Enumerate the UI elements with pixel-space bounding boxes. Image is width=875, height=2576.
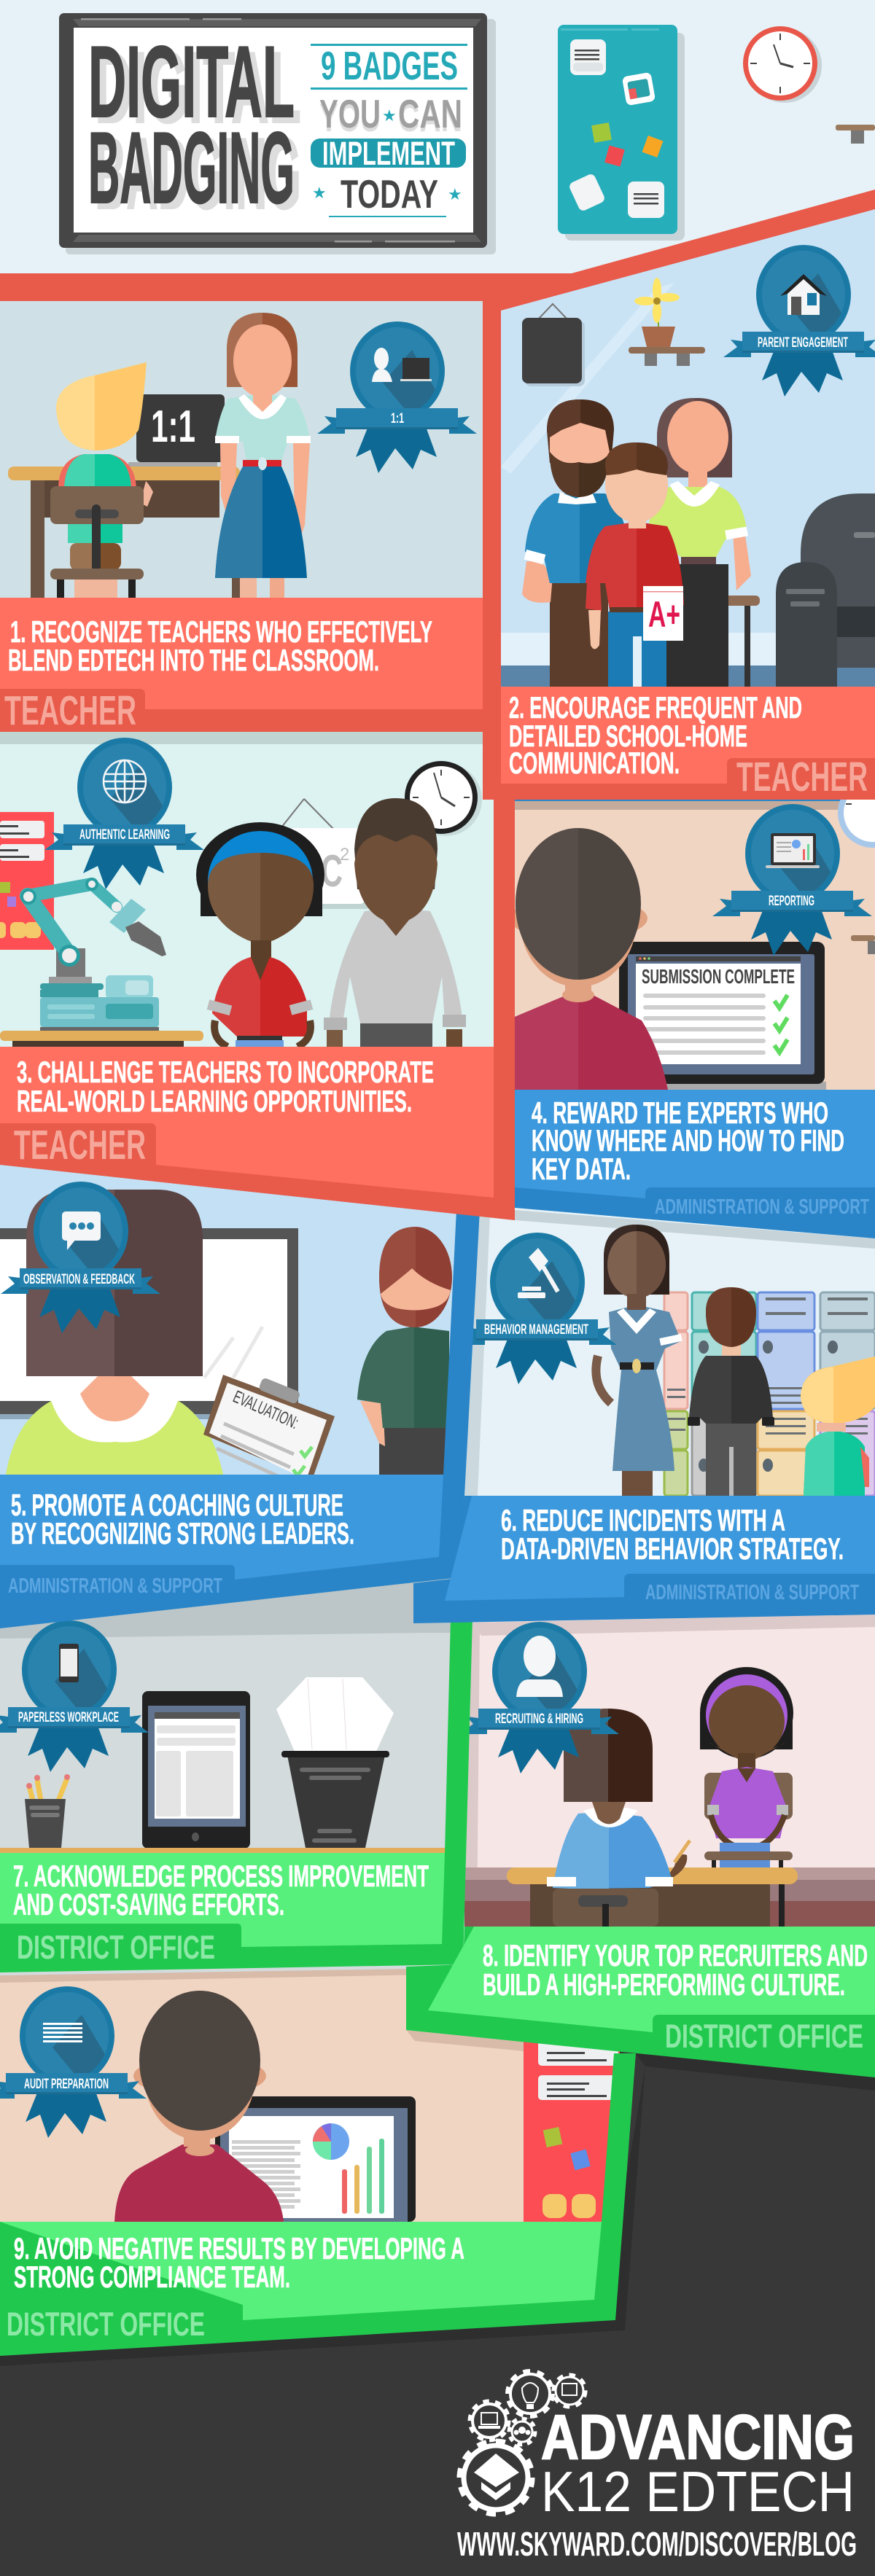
person from behind bbox=[509, 828, 668, 1090]
interviewer from behind bbox=[547, 1709, 690, 1927]
title: digital badging: DIGITAL bbox=[88, 26, 295, 138]
badge: behavior management bbox=[457, 1233, 617, 1384]
person from behind bbox=[114, 1991, 284, 2222]
frame and caption 6 bbox=[413, 1496, 875, 1623]
logo icons bbox=[474, 2383, 577, 2500]
badge: paperless workplace bbox=[0, 1620, 149, 1772]
badge: reporting bbox=[712, 804, 872, 956]
frame and caption 7: AND COST-SAVING EFFORTS. bbox=[13, 1887, 284, 1921]
dark footer background bbox=[0, 2034, 875, 2576]
wall shelf bbox=[851, 935, 875, 954]
badge: behavior management: BEHAVIOR MANAGEMENT bbox=[484, 1322, 588, 1338]
title: digital badging bbox=[88, 26, 301, 230]
red frame panels 1 and 2 bbox=[0, 190, 875, 800]
chalk board with C squared: C bbox=[321, 846, 343, 897]
badge: paperless workplace: PAPERLESS WORKPLACE bbox=[18, 1710, 119, 1725]
panel 4: reporting bbox=[509, 778, 875, 1238]
badge: audit preparation bbox=[0, 1986, 147, 2138]
header whiteboard title: BADGING bbox=[95, 117, 301, 230]
panel 3: authentic learning bbox=[0, 732, 494, 1053]
clock corner bbox=[838, 778, 875, 848]
frame and caption 9: 9. AVOID NEGATIVE RESULTS BY DEVELOPING A bbox=[14, 2231, 464, 2265]
teacher bbox=[215, 313, 311, 598]
frame and caption 3: TEACHER bbox=[14, 1122, 146, 1168]
chalk board with C squared bbox=[273, 799, 370, 909]
teacher woman bbox=[596, 1225, 682, 1496]
badge: observation and feedback bbox=[1, 1182, 160, 1333]
mother bbox=[648, 398, 751, 687]
blond boy bbox=[801, 1357, 875, 1496]
subtitle: 9 badges you can implement today: YOU bbox=[319, 91, 381, 136]
badge: 1:1 bbox=[317, 321, 477, 473]
lockers bbox=[664, 1292, 875, 1496]
panel 5: observation and feedback bbox=[0, 1159, 485, 1480]
bearded man bbox=[357, 1227, 452, 1475]
badge: 1:1: 1:1 bbox=[391, 411, 404, 426]
dark bins bbox=[776, 493, 875, 687]
frame and caption 8 bbox=[406, 1927, 875, 2077]
frame and caption 5: 5. PROMOTE A COACHING CULTURE bbox=[11, 1488, 343, 1522]
frame and caption 9 bbox=[0, 2053, 636, 2356]
clipboard: evaluation: EVALUATION: bbox=[230, 1387, 301, 1433]
caption 2: COMMUNICATION. bbox=[509, 746, 680, 780]
child with A+ paper: A+ bbox=[648, 594, 680, 635]
panel 7: paperless workplace bbox=[0, 1567, 472, 1975]
frame and caption 9: DISTRICT OFFICE bbox=[7, 2306, 205, 2343]
student man bbox=[324, 798, 466, 1048]
laptop with chart bbox=[215, 2096, 416, 2222]
chalk board with C squared: 2 bbox=[340, 845, 349, 864]
desk with laptop: 1:1 bbox=[151, 402, 195, 452]
seated candidate bbox=[700, 1667, 793, 1867]
panel 9: audit preparation bbox=[0, 1961, 875, 2366]
panel 1: one-to-one bbox=[0, 301, 483, 734]
laptop: submission complete bbox=[619, 942, 826, 1090]
frame and caption 7 bbox=[0, 1618, 472, 1972]
caption 1: 1. RECOGNIZE TEACHERS WHO EFFECTIVELY bbox=[10, 614, 432, 649]
hanging picture bbox=[522, 304, 585, 386]
title: digital badging: DIGITAL bbox=[95, 31, 301, 144]
student in black bbox=[688, 1287, 774, 1496]
frame and caption 7: 7. ACKNOWLEDGE PROCESS IMPROVEMENT bbox=[13, 1859, 429, 1893]
subtitle: 9 badges you can implement today bbox=[311, 43, 467, 217]
frame and caption 5: ADMINISTRATION & SUPPORT bbox=[8, 1574, 222, 1598]
subtitle: 9 badges you can implement today: 9 BADGES bbox=[321, 43, 458, 88]
desk bbox=[0, 1031, 203, 1048]
subtitle: 9 badges you can implement today: ★ bbox=[448, 186, 462, 204]
student girl bbox=[196, 822, 324, 1047]
logo gears bbox=[459, 2371, 586, 2514]
badge: reporting: REPORTING bbox=[769, 894, 814, 909]
desk with laptop bbox=[8, 394, 240, 598]
woman from behind bbox=[6, 1190, 223, 1475]
panel 8: recruiting and hiring bbox=[459, 1611, 875, 1928]
subtitle: 9 badges you can implement today: ★ bbox=[382, 107, 397, 125]
panel 6: behavior management bbox=[457, 1203, 875, 1499]
robot arm bbox=[20, 878, 166, 1031]
subtitle: 9 badges you can implement today: CAN bbox=[398, 91, 462, 136]
student at desk bbox=[50, 362, 153, 598]
tablet bbox=[142, 1691, 250, 1849]
classroom whiteboard bbox=[0, 1228, 298, 1419]
subtitle: 9 badges you can implement today: YOU bbox=[319, 95, 381, 140]
desk bbox=[507, 1860, 798, 1927]
badge: parent engagement bbox=[723, 245, 875, 397]
frame and caption 9: STRONG COMPLIANCE TEAM. bbox=[14, 2260, 290, 2294]
waste bin with paper bbox=[276, 1677, 394, 1848]
red bulletin board bbox=[524, 2034, 620, 2222]
child with A+ paper bbox=[586, 442, 684, 687]
caption 1 bbox=[0, 598, 483, 734]
badge: recruiting and hiring bbox=[459, 1622, 619, 1773]
wall clock bbox=[743, 26, 822, 103]
badge: authentic learning bbox=[44, 738, 204, 889]
caption 1: BLEND EDTECH INTO THE CLASSROOM. bbox=[8, 643, 379, 677]
frame and caption 5 bbox=[0, 1210, 480, 1628]
subtitle: 9 badges you can implement today: TODAY bbox=[341, 171, 438, 216]
header whiteboard title: BADGING bbox=[88, 112, 295, 225]
badge: recruiting and hiring: RECRUITING & HIRING bbox=[495, 1712, 583, 1727]
badge: observation and feedback: OBSERVATION & FEEDBACK bbox=[23, 1272, 135, 1287]
badge: audit preparation: AUDIT PREPARATION bbox=[24, 2077, 109, 2092]
clipboard: evaluation bbox=[203, 1375, 335, 1480]
frame and caption 7: DISTRICT OFFICE bbox=[17, 1929, 215, 1966]
caption 2 bbox=[501, 687, 875, 800]
subtitle: 9 badges you can implement today: CAN bbox=[398, 95, 462, 140]
subtitle: 9 badges you can implement today: ★ bbox=[312, 184, 327, 203]
flower on shelf bbox=[629, 278, 705, 366]
teal bulletin board bbox=[558, 25, 685, 241]
father bbox=[522, 399, 628, 687]
side table bbox=[689, 596, 760, 687]
badge: authentic learning: AUTHENTIC LEARNING bbox=[79, 827, 170, 843]
frame and caption 3: 3. CHALLENGE TEACHERS TO INCORPORATE bbox=[17, 1055, 434, 1089]
pencil cup bbox=[25, 1774, 70, 1848]
wall shelf bbox=[836, 125, 875, 144]
frame and caption 5: BY RECOGNIZING STRONG LEADERS. bbox=[11, 1516, 354, 1550]
header whiteboard title bbox=[59, 13, 496, 254]
red bulletin board bbox=[0, 812, 54, 950]
frame and caption 3: REAL-WORLD LEARNING OPPORTUNITIES. bbox=[17, 1084, 412, 1118]
caption 4 bbox=[515, 1090, 875, 1238]
footer logo: advancing k12 edtech bbox=[459, 2371, 855, 2524]
caption 1: TEACHER bbox=[4, 687, 136, 734]
panel 2: parent engagement bbox=[501, 209, 875, 800]
caption 4: KEY DATA. bbox=[532, 1152, 631, 1186]
wall clock bbox=[405, 761, 482, 836]
subtitle: 9 badges you can implement today: IMPLEMENT bbox=[322, 135, 455, 172]
frame and caption 3 bbox=[0, 800, 515, 1220]
